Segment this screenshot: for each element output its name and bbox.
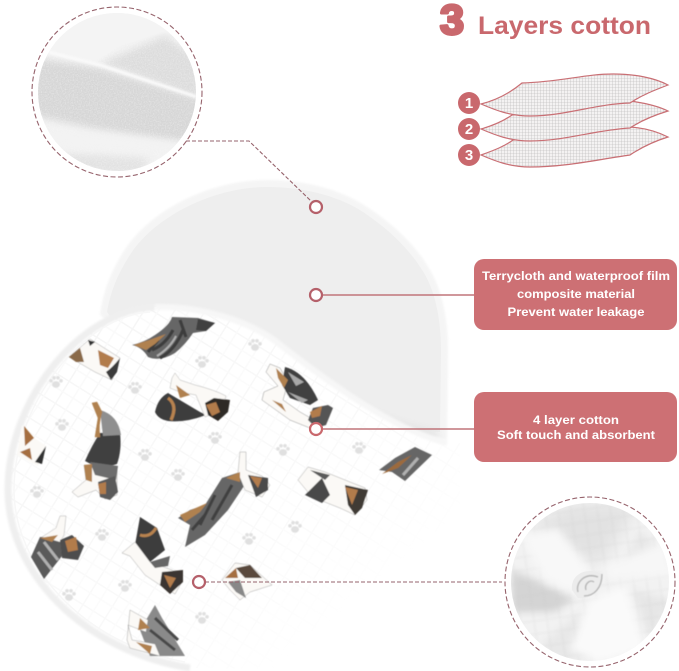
number badges: 3 [465,147,473,164]
panel: muslin detail circle [502,494,678,670]
dog G [122,517,183,594]
connector: back cloth to terrycloth label [310,289,474,301]
panel: back cloth terry side [100,180,448,440]
layer 1 [481,74,668,116]
connector: terrycloth circle to back cloth [186,141,322,213]
callout: terrycloth and waterproof film: Terrycloth and waterproof film [482,271,670,283]
diagram: three cotton layers [458,74,668,167]
dog B [69,339,120,380]
callout: 4 layer cotton: 4 layer cotton [533,415,619,427]
dog prints [17,317,432,656]
dog M [222,563,272,600]
panel: terrycloth detail circle [30,5,205,180]
dog A [132,317,215,359]
callout: terrycloth and waterproof film: composite material [517,289,635,301]
heading: 3 Layers cotton [440,0,651,43]
panel: front cloth muslin side [0,300,470,671]
callout: 4 layer cotton [474,392,677,462]
connector: front cloth to cotton label [310,423,474,435]
number badges: 2 [465,121,473,138]
paw prints [30,339,366,624]
dog C [155,373,230,421]
dog F [31,516,84,579]
callout: terrycloth and waterproof film [474,259,677,330]
connector: front cloth to muslin circle [193,576,505,588]
dog E [17,425,46,466]
layer 2 [481,101,668,141]
dog D [72,402,121,500]
callout: 4 layer cotton: Soft touch and absorbent [497,430,655,442]
dog H [127,605,185,656]
dog K [298,467,368,515]
heading: 3 Layers cotton: Layers cotton [478,12,651,40]
callout: terrycloth and waterproof film: Prevent water leakage [508,307,644,319]
dog J [262,364,333,428]
number badges: 1 [465,95,473,112]
layer 3 [481,127,668,167]
number badges [458,92,480,166]
dog I [178,452,270,547]
dog L [379,447,432,481]
